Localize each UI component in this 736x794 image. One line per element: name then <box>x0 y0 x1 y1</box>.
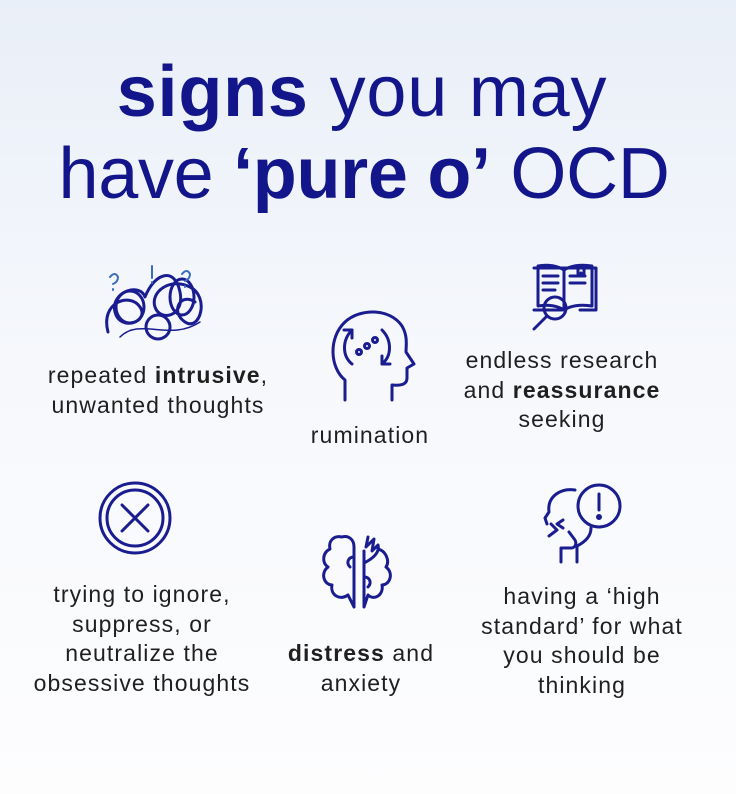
icon: scribble thoughts <box>105 265 203 340</box>
text: distress and anxiety <box>288 640 434 696</box>
title <box>58 52 670 214</box>
text: distress and anxiety: anxiety <box>321 670 401 696</box>
text: distress and anxiety: distress and <box>288 640 434 666</box>
text: high standard: having a ‘high <box>503 583 661 609</box>
icon: x circle <box>98 482 172 554</box>
text: trying to ignore: suppress, or <box>72 610 212 636</box>
icon: brain with lightning <box>322 535 392 609</box>
icon: head rumination <box>332 310 416 402</box>
text: intrusive thoughts: repeated intrusive, <box>48 362 268 388</box>
text: rumination: rumination <box>311 422 429 448</box>
text: research and reassurance <box>464 347 660 432</box>
text: trying to ignore: neutralize the <box>65 640 219 666</box>
text: research and reassurance: and reassurance <box>464 376 660 402</box>
text: trying to ignore: obsessive thoughts <box>34 670 250 696</box>
text: intrusive thoughts: unwanted thoughts <box>51 392 265 418</box>
text: intrusive thoughts <box>48 362 268 418</box>
text: trying to ignore: trying to ignore, <box>53 581 231 607</box>
title: signs you may <box>117 52 607 132</box>
text: research and reassurance: seeking <box>518 406 605 432</box>
title: have ‘pure o’ OCD <box>58 134 670 214</box>
text: high standard <box>481 583 683 698</box>
text: research and reassurance: endless research <box>466 347 658 373</box>
text: trying to ignore <box>34 581 250 696</box>
text: high standard: thinking <box>538 672 626 698</box>
icon: book with magnifier <box>532 264 598 331</box>
text: high standard: you should be <box>503 642 661 668</box>
icon: head with exclamation <box>544 484 622 564</box>
text: high standard: standard’ for what <box>481 612 683 638</box>
